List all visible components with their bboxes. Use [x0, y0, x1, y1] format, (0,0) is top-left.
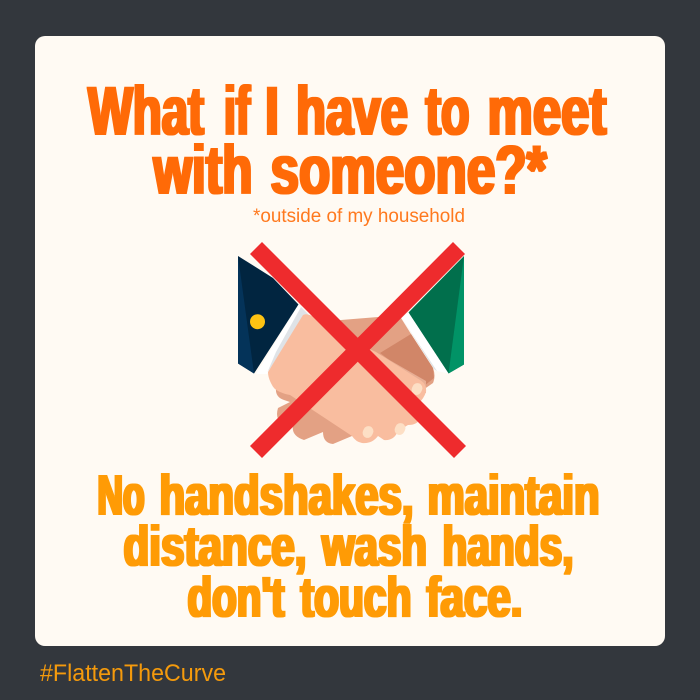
icon: left sleeve — [238, 256, 309, 374]
heading: with — [153, 132, 252, 208]
heading: meet — [488, 72, 607, 150]
heading — [88, 72, 607, 208]
heading: if — [224, 72, 251, 150]
advice text: touch — [300, 566, 412, 630]
heading: have — [296, 72, 408, 150]
icon: handshake crossed out — [238, 242, 466, 458]
advice text: maintain — [428, 464, 600, 528]
advice text: hands, — [442, 514, 574, 578]
heading: I — [265, 72, 279, 150]
footnote text: *outside of my household — [253, 206, 465, 227]
advice text: face. — [426, 566, 522, 630]
advice text: distance, — [124, 514, 306, 578]
icon: front hand — [268, 314, 426, 443]
panel: main card — [35, 36, 665, 646]
advice text — [98, 464, 600, 630]
advice text: don't — [188, 566, 285, 630]
advice text: wash — [321, 514, 427, 578]
heading: someone?* — [270, 132, 547, 208]
heading: What — [88, 72, 204, 150]
heading: to — [426, 72, 470, 150]
advice text: No — [98, 464, 144, 528]
hashtag: #FlattenTheCurve — [40, 660, 226, 687]
advice text: handshakes, — [160, 464, 414, 528]
icon: red cross — [250, 242, 466, 458]
icon: right sleeve — [402, 256, 464, 374]
icon: back hand — [276, 317, 434, 444]
